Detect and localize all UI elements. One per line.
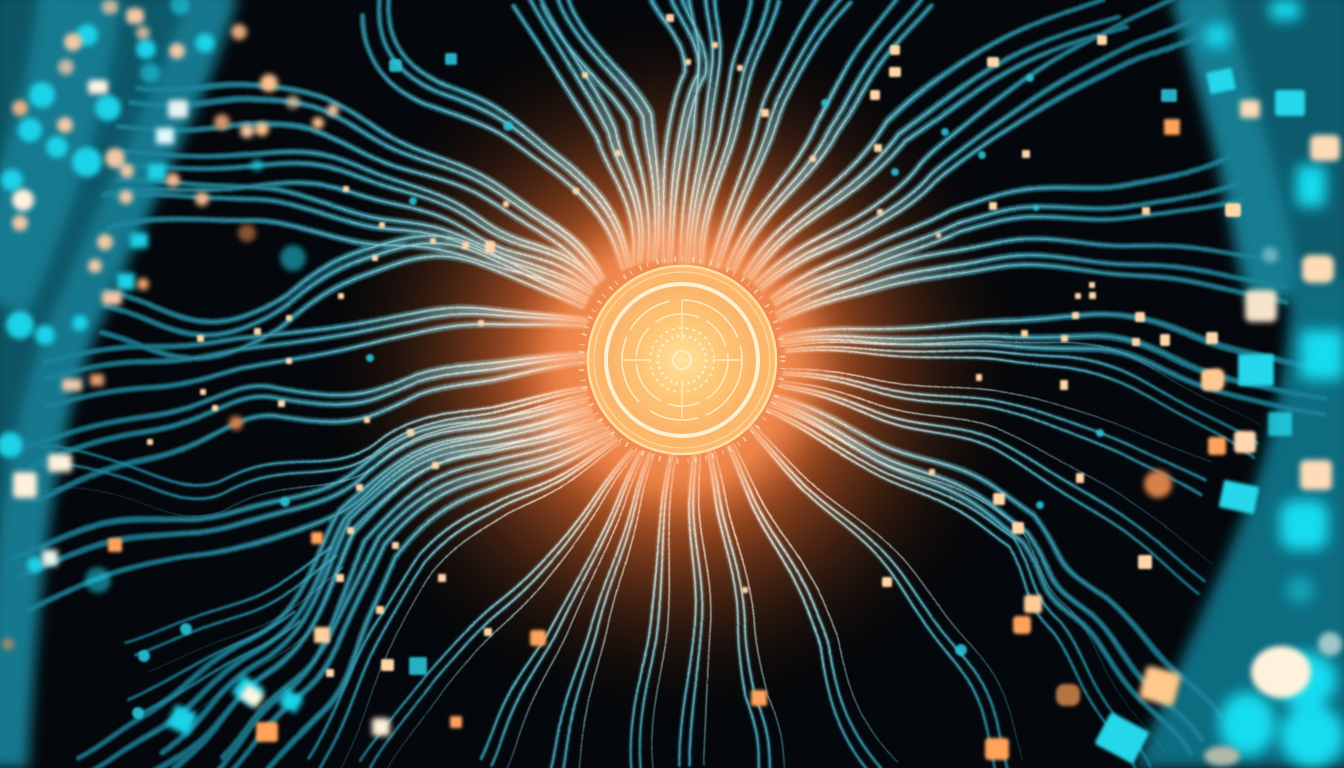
core halo <box>552 230 812 490</box>
teal curved bands: right edge <box>1135 0 1344 768</box>
circuit core disc <box>588 266 776 454</box>
blurred bokeh lights: left column warm <box>2 0 390 736</box>
circuit node squares: teal dots <box>132 53 1177 719</box>
circuit node squares: right column teal <box>1094 68 1305 764</box>
blurred bokeh lights: right column warm <box>1138 100 1342 766</box>
blurred bokeh lights: right column teal <box>1205 0 1344 768</box>
circuit lines: fine lower strands, teal body <box>30 330 1250 768</box>
circuit node squares: amber <box>147 14 1241 677</box>
circuit node squares: saturated orange <box>108 119 1256 760</box>
teal curved bands: left edge <box>0 0 235 768</box>
blurred bokeh lights: left column teal <box>0 0 306 736</box>
core outer tick ring <box>581 259 783 461</box>
